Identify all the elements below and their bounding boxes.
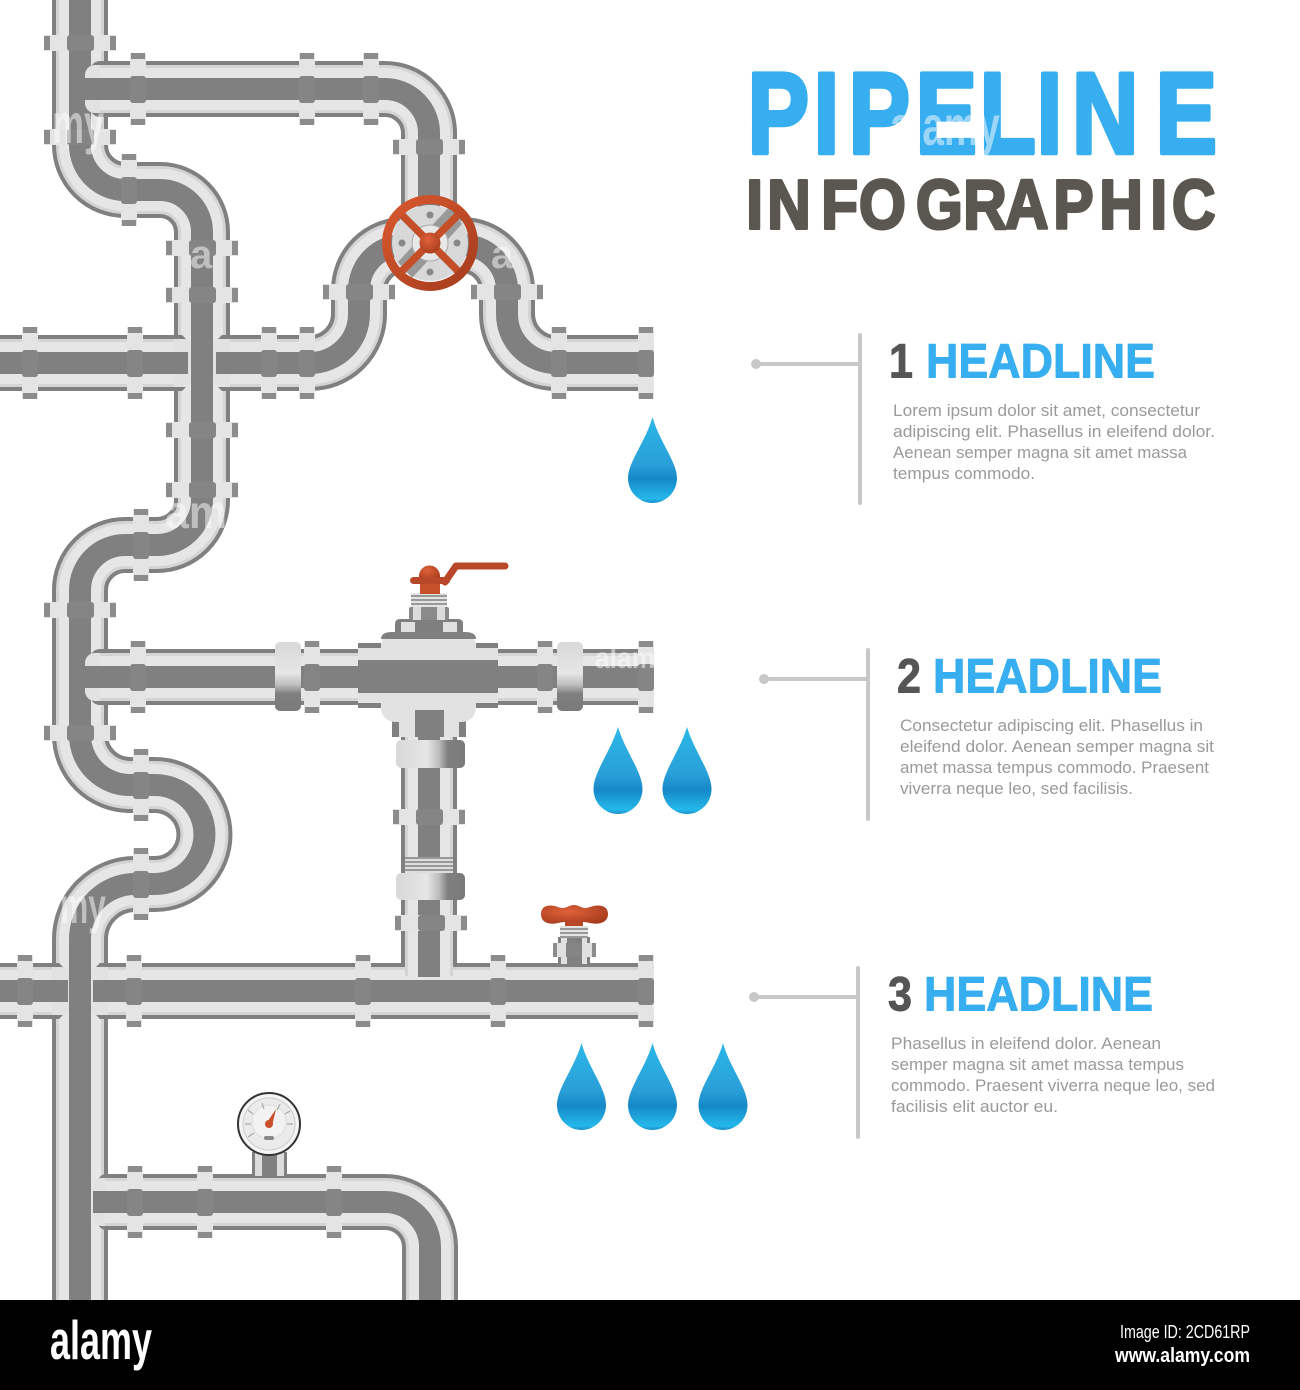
watermark overlays: a bbox=[190, 233, 213, 277]
pipe: horizontal leak line 1 with arch bbox=[0, 245, 654, 399]
footer bar: Image ID: 2CD61RP bbox=[1120, 1322, 1250, 1342]
section 1: text: 1 bbox=[889, 336, 913, 388]
section 3: text: 3 bbox=[888, 968, 912, 1022]
small butterfly tap bbox=[541, 905, 608, 964]
watermark overlays bbox=[52, 92, 1000, 934]
section 3: text: semper magna sit amet massa tempus bbox=[891, 1055, 1184, 1074]
section 2: leader line bbox=[759, 648, 870, 821]
watermark overlays: alamy bbox=[890, 94, 1000, 157]
section 2: text: 2 bbox=[897, 650, 921, 704]
title bbox=[746, 50, 1217, 244]
section 3: leader line bbox=[749, 966, 860, 1139]
section 3: text: facilisis elit auctor eu. bbox=[891, 1097, 1058, 1116]
pipe: top horizontal into valve bbox=[85, 53, 465, 230]
section 1: text: Aenean semper magna sit amet massa bbox=[893, 443, 1188, 462]
ball valve with red lever bbox=[358, 566, 505, 737]
section 2: water drops bbox=[594, 727, 712, 814]
section 1: text: Lorem ipsum dolor sit amet, consectetur bbox=[893, 401, 1200, 420]
pipe: vertical branch from ball valve down bbox=[393, 715, 467, 977]
section 3: text bbox=[888, 968, 1215, 1116]
section 2: text: HEADLINE bbox=[933, 650, 1162, 704]
pipe: bottom horizontal leak line 3 bbox=[0, 955, 654, 1027]
section 2: text: amet massa tempus commodo. Praesent bbox=[900, 758, 1209, 777]
footer bar: www.alamy.com bbox=[1114, 1345, 1250, 1367]
section 1: leader line bbox=[751, 333, 862, 505]
crossing joint at line 1 bbox=[174, 335, 230, 391]
section 2: text: Consectetur adipiscing elit. Phasellus in bbox=[900, 716, 1203, 735]
section 2: text: eleifend dolor. Aenean semper magna sit bbox=[900, 737, 1214, 756]
section 3: text: commodo. Praesent viverra neque leo, sed bbox=[891, 1076, 1215, 1095]
section 3: text: Phasellus in eleifend dolor. Aenean bbox=[891, 1034, 1161, 1053]
section 1: text bbox=[889, 336, 1215, 483]
pipe: gauge line at the bottom bbox=[93, 1166, 430, 1300]
watermark overlays: my bbox=[60, 878, 106, 934]
pressure gauge bbox=[238, 1093, 300, 1176]
red wheel valve bbox=[386, 200, 474, 286]
footer bar: alamy bbox=[50, 1309, 152, 1371]
section 1: text: tempus commodo. bbox=[893, 464, 1035, 483]
watermark overlays: my bbox=[52, 92, 104, 155]
section 1: text: adipiscing elit. Phasellus in eleifend dolor. bbox=[893, 422, 1215, 441]
pipe: middle horizontal line 2 bbox=[85, 641, 654, 713]
section 3: text: HEADLINE bbox=[924, 968, 1153, 1022]
section 2: text bbox=[897, 650, 1214, 798]
watermark overlays: a bbox=[491, 233, 514, 277]
section 1: text: HEADLINE bbox=[926, 336, 1155, 388]
title: PIPELINE bbox=[748, 50, 1217, 178]
section 2: text: viverra neque leo, sed facilisis. bbox=[900, 779, 1133, 798]
watermark overlays: am bbox=[165, 486, 227, 538]
footer bar bbox=[0, 1300, 1300, 1390]
title: INFOGRAPHIC bbox=[746, 165, 1215, 244]
section 3: water drops bbox=[557, 1043, 748, 1130]
pipe: main winding vertical line bbox=[44, 0, 238, 1300]
crossing joint at line 3 bbox=[52, 963, 108, 1019]
watermark overlays: alam bbox=[595, 642, 655, 675]
section 1: water drop bbox=[628, 417, 677, 503]
